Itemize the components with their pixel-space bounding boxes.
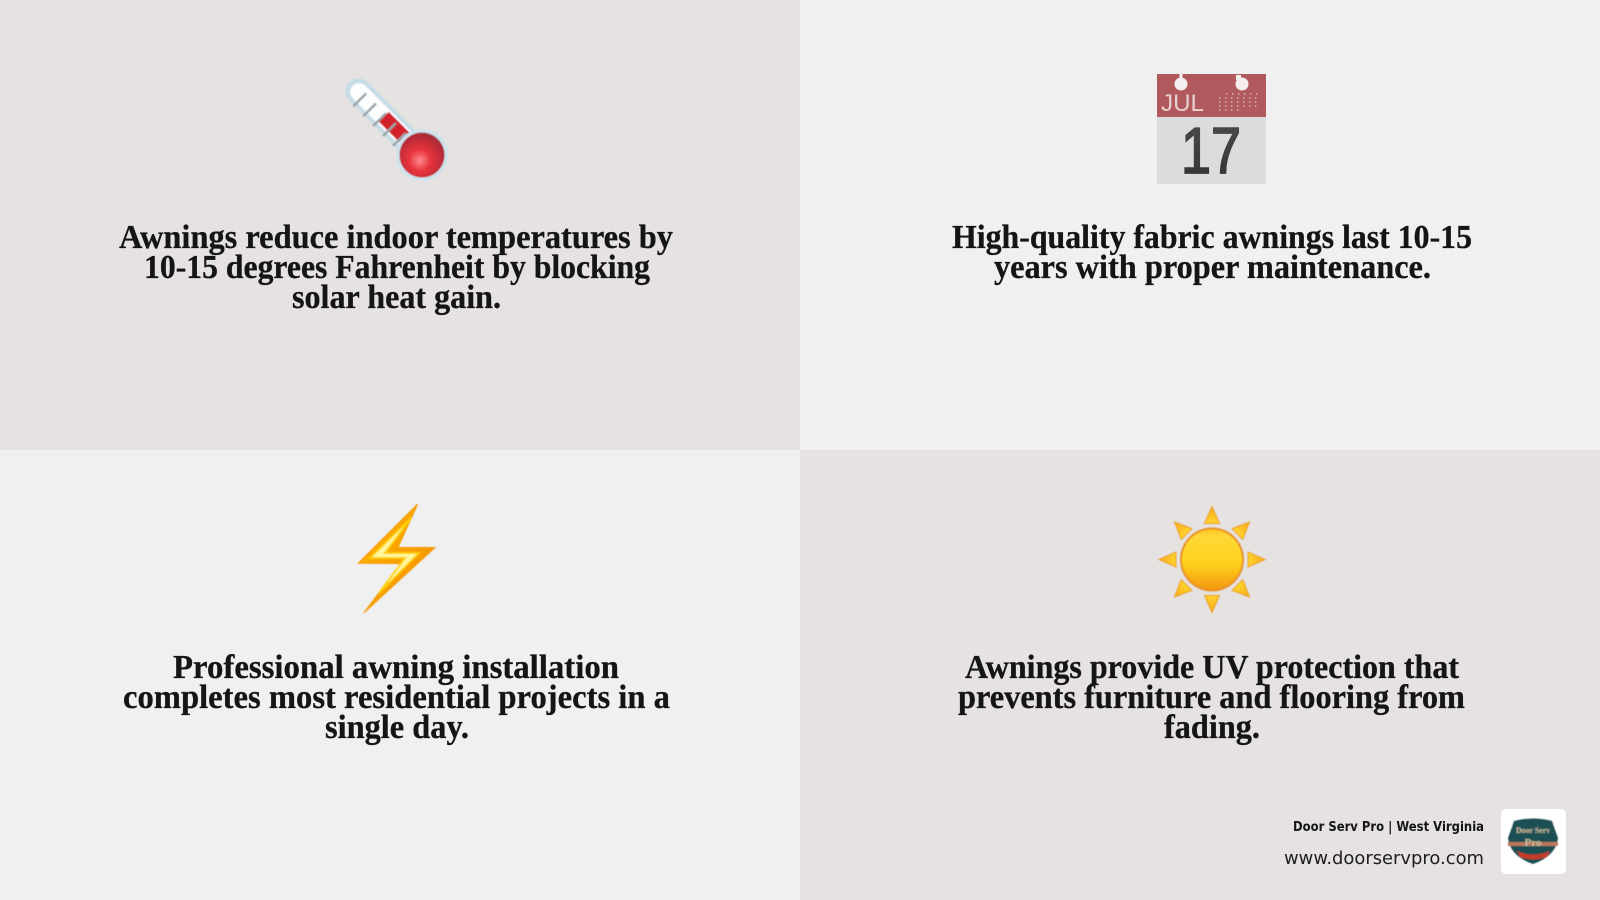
logo badge	[1501, 809, 1566, 874]
panel: bottom left background	[0, 450, 800, 900]
icon: calendar: JUL	[1161, 90, 1204, 117]
icon: calendar: 17	[1181, 114, 1241, 187]
panel: top left background	[0, 0, 800, 450]
heading: temperature fact: solar heat gain.	[292, 279, 501, 316]
brand name: Door Serv Pro | West Virginia	[1293, 820, 1484, 835]
heading: installation fact: completes most residential projects in a	[123, 679, 670, 716]
icon: lightning bolt	[358, 504, 435, 613]
heading: fabric lifespan fact: years with proper maintenance.	[994, 249, 1431, 286]
heading: installation fact: single day.	[325, 709, 469, 746]
heading: installation fact: Professional awning installation	[173, 649, 619, 686]
logo badge: Door Serv	[1516, 826, 1550, 835]
heading: fabric lifespan fact: High-quality fabric awnings last 10-15	[952, 219, 1472, 256]
icon: thermometer	[331, 64, 459, 192]
panel: top right background	[800, 0, 1600, 450]
logo badge: Pro	[1525, 837, 1542, 849]
heading: temperature fact: 10-15 degrees Fahrenheit by blocking	[144, 249, 650, 286]
panel: bottom right background	[800, 450, 1600, 900]
icon: sun	[1159, 506, 1265, 612]
icon: calendar	[1157, 74, 1266, 187]
heading: UV protection fact: fading.	[1164, 709, 1260, 746]
heading: UV protection fact: Awnings provide UV protection that	[965, 649, 1460, 686]
website address: www.doorservpro.com	[1284, 848, 1484, 869]
heading: UV protection fact	[958, 649, 1465, 746]
heading: installation fact	[123, 649, 670, 746]
heading: fabric lifespan fact	[952, 219, 1472, 286]
heading: UV protection fact: prevents furniture and flooring from	[958, 679, 1465, 716]
heading: temperature fact: Awnings reduce indoor temperatures by	[119, 219, 673, 256]
heading: temperature fact	[119, 219, 673, 316]
